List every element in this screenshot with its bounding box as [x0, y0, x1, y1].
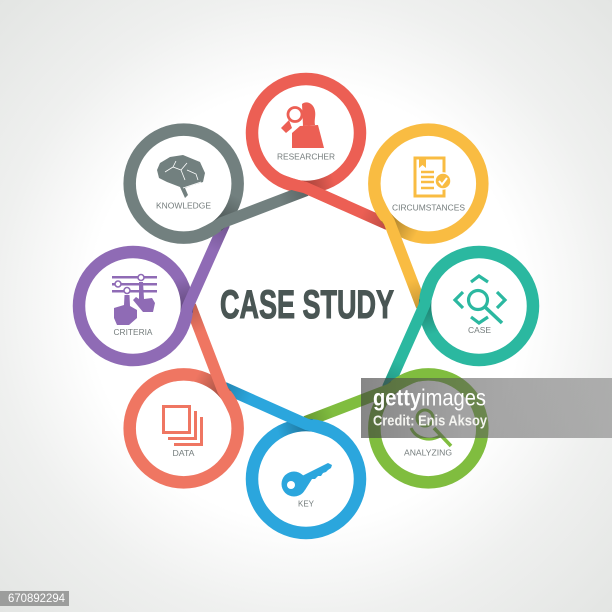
icon: circumstances — [415, 157, 451, 196]
watermark: getty images: Credit: Enis Aksoy — [373, 412, 488, 430]
label: analyzing: ANALYZING — [404, 448, 452, 458]
icon: data — [164, 406, 203, 446]
icon: case — [455, 276, 505, 323]
ring: knowledge — [107, 88, 306, 287]
label: circumstances: CIRCUMSTANCES — [392, 204, 465, 212]
title: CASE STUDY — [220, 283, 394, 327]
icon: researcher — [281, 102, 324, 148]
icon: analyzing — [411, 410, 451, 446]
label: criteria: CRITERIA — [114, 328, 153, 337]
watermark: getty images: gettyimages — [373, 384, 486, 410]
icon: criteria — [112, 274, 157, 325]
watermark: getty images — [361, 378, 612, 438]
ring: case — [388, 252, 533, 388]
label: knowledge: KNOWLEDGE — [156, 202, 211, 210]
image id badge: 670892294 — [8, 593, 66, 605]
label: case: CASE — [468, 326, 491, 335]
label: researcher: RESEARCHER — [277, 152, 335, 162]
ring: data — [88, 306, 287, 505]
icon: key — [282, 463, 332, 496]
ring: criteria — [79, 224, 224, 360]
label: data: DATA — [172, 449, 195, 458]
ring: circumstances — [325, 107, 524, 306]
ribbon overlap: researcher over knowledge — [276, 178, 345, 205]
ring: researcher — [252, 79, 388, 224]
label: key: KEY — [298, 500, 315, 508]
image id badge — [0, 591, 69, 606]
ring: key — [224, 388, 360, 533]
ring: analyzing — [306, 325, 505, 524]
icon: knowledge — [157, 155, 205, 198]
